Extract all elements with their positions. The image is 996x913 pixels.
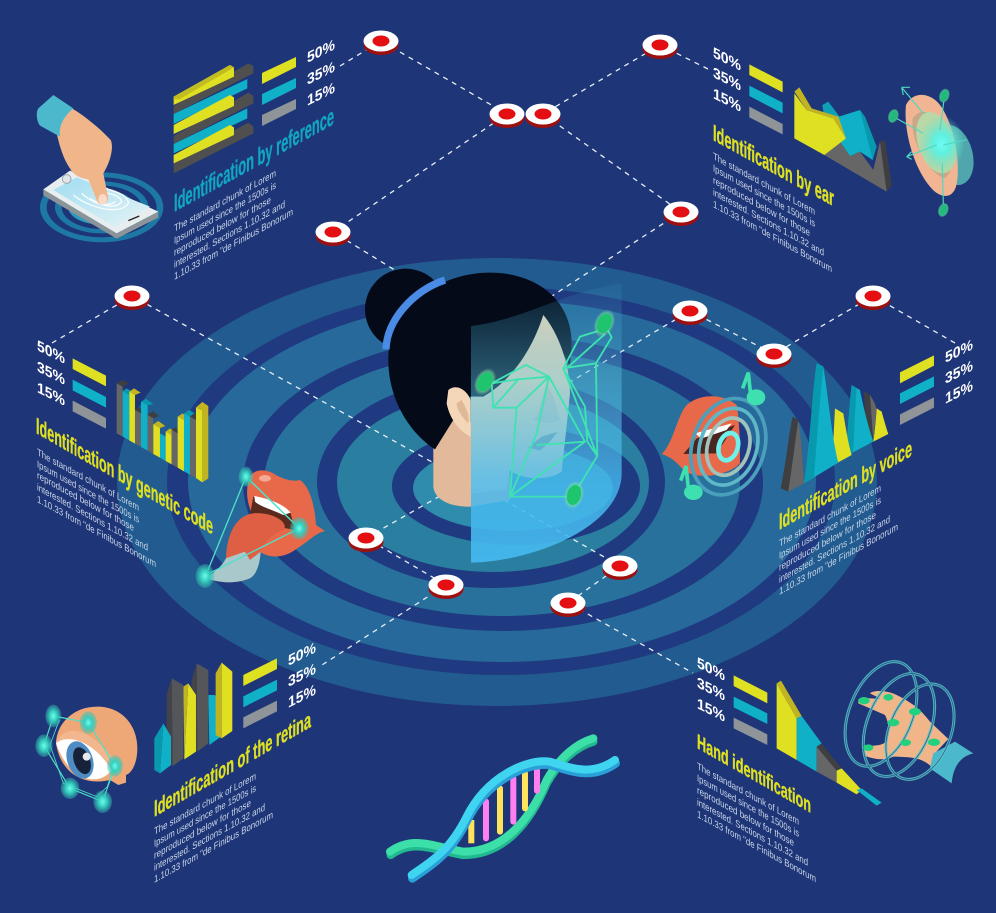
glass scan panel [471,283,622,563]
percent labels: 15% [697,696,725,726]
body text: 1.10.33 from "de Finibus Bonorum [37,494,156,570]
body text: interested. Sections 1.10.32 and [37,482,148,554]
body text: The standard chunk of Lorem [174,167,276,235]
concentric target rings [117,258,877,706]
stacked bar chart [174,63,253,173]
percent labels [288,640,316,712]
body text: reproduced below for those [37,470,134,534]
heading: Identification by reference [174,102,334,218]
eye illustration [35,705,137,813]
body text: Ipsum used since the 1500s is [697,773,799,840]
percent labels: 35% [713,65,741,95]
central face with biometric scan [365,269,622,563]
body text: reproduced below for those [779,509,876,574]
hand scan illustration [831,651,973,789]
body text: Ipsum used since the 1500s is [174,180,276,247]
DNA helix [390,738,616,878]
body text: 1.10.33 from "de Finibus Bonorum [779,521,898,598]
heading: Identification of the retina [154,707,311,823]
body text: interested. Sections 1.10.32 and [713,187,824,259]
body text: The standard chunk of Lorem [779,482,881,550]
body text: reproduced below for those [154,797,251,862]
body text [174,167,293,283]
body text: The standard chunk of Lorem [154,770,256,838]
panel: hand identification [697,651,973,885]
body text [37,447,156,570]
percent labels: 50% [945,337,973,367]
licking lips illustration [196,467,325,588]
body text: reproduced below for those [713,175,810,239]
percent labels [713,45,741,116]
percent labels [697,655,725,726]
panel: identification by genetic code [36,338,325,588]
body text: 1.10.33 from "de Finibus Bonorum [713,199,832,275]
body text: interested. Sections 1.10.32 and [779,514,890,586]
percent labels: 15% [713,86,741,116]
legend swatches [262,57,296,126]
panel: identification by reference [37,37,335,283]
body text: The standard chunk of Lorem [713,151,815,218]
body text: reproduced below for those [697,785,794,849]
body text [697,761,816,885]
stepped chart [777,681,882,806]
body text: 1.10.33 from "de Finibus Bonorum [174,206,293,283]
percent labels: 50% [37,338,65,368]
percent labels: 35% [37,359,65,389]
percent labels: 50% [288,640,316,670]
legend swatches [73,358,106,429]
percent labels: 15% [37,380,65,410]
waveform chart [781,363,888,492]
neck [433,420,510,507]
panel: identification by ear [713,45,980,275]
column chart [154,663,232,773]
bar chart [117,380,208,482]
panel: identification of the retina [35,640,316,886]
ear [447,387,471,437]
percent labels: 50% [697,655,725,685]
body text [154,770,273,886]
percent labels: 35% [697,675,725,705]
scan nodes [469,306,620,512]
body text [713,151,832,275]
body text: Ipsum used since the 1500s is [779,495,881,562]
percent labels: 35% [945,358,973,388]
ear scan illustration [887,87,980,217]
panel: identification by voice [662,337,973,598]
heading: Hand identification [697,729,811,818]
body text: The standard chunk of Lorem [37,447,139,514]
body text: Ipsum used since the 1500s is [154,783,256,850]
percent labels: 15% [307,80,335,110]
body text: Ipsum used since the 1500s is [713,163,815,230]
hair [388,273,572,449]
body text: 1.10.33 from "de Finibus Bonorum [154,809,273,886]
nose and mouth [528,432,557,451]
percent labels: 35% [307,59,335,89]
body text: reproduced below for those [174,194,271,259]
percent labels: 50% [713,45,741,75]
percent labels: 50% [307,37,335,67]
percent labels [307,37,335,110]
percent labels: 35% [288,661,316,691]
body text: interested. Sections 1.10.32 and [697,797,808,869]
legend swatches [734,675,767,745]
heading: Identification by ear [713,120,834,212]
connector pins [114,30,890,617]
hair bun [365,269,446,350]
wireframe mesh [492,328,612,497]
percent labels [945,337,973,408]
fingerprint phone illustration [37,95,163,242]
body text: interested. Sections 1.10.32 and [154,802,265,874]
dashed connector lines [52,41,955,673]
body text: interested. Sections 1.10.32 and [174,199,285,271]
percent labels: 15% [288,682,316,712]
legend swatches [243,658,277,728]
percent labels: 15% [945,378,973,408]
hair band [386,280,445,349]
body text: 1.10.33 from "de Finibus Bonorum [697,809,816,885]
percent labels [37,338,65,410]
legend swatches [749,64,783,134]
body text [779,482,898,598]
singing lips illustration [662,373,778,505]
body text: The standard chunk of Lorem [697,761,799,828]
body text: Ipsum used since the 1500s is [37,459,139,526]
area chart [794,87,892,192]
face skin [471,315,570,493]
heading: Identification by genetic code [36,414,213,540]
legend swatches [900,355,934,425]
